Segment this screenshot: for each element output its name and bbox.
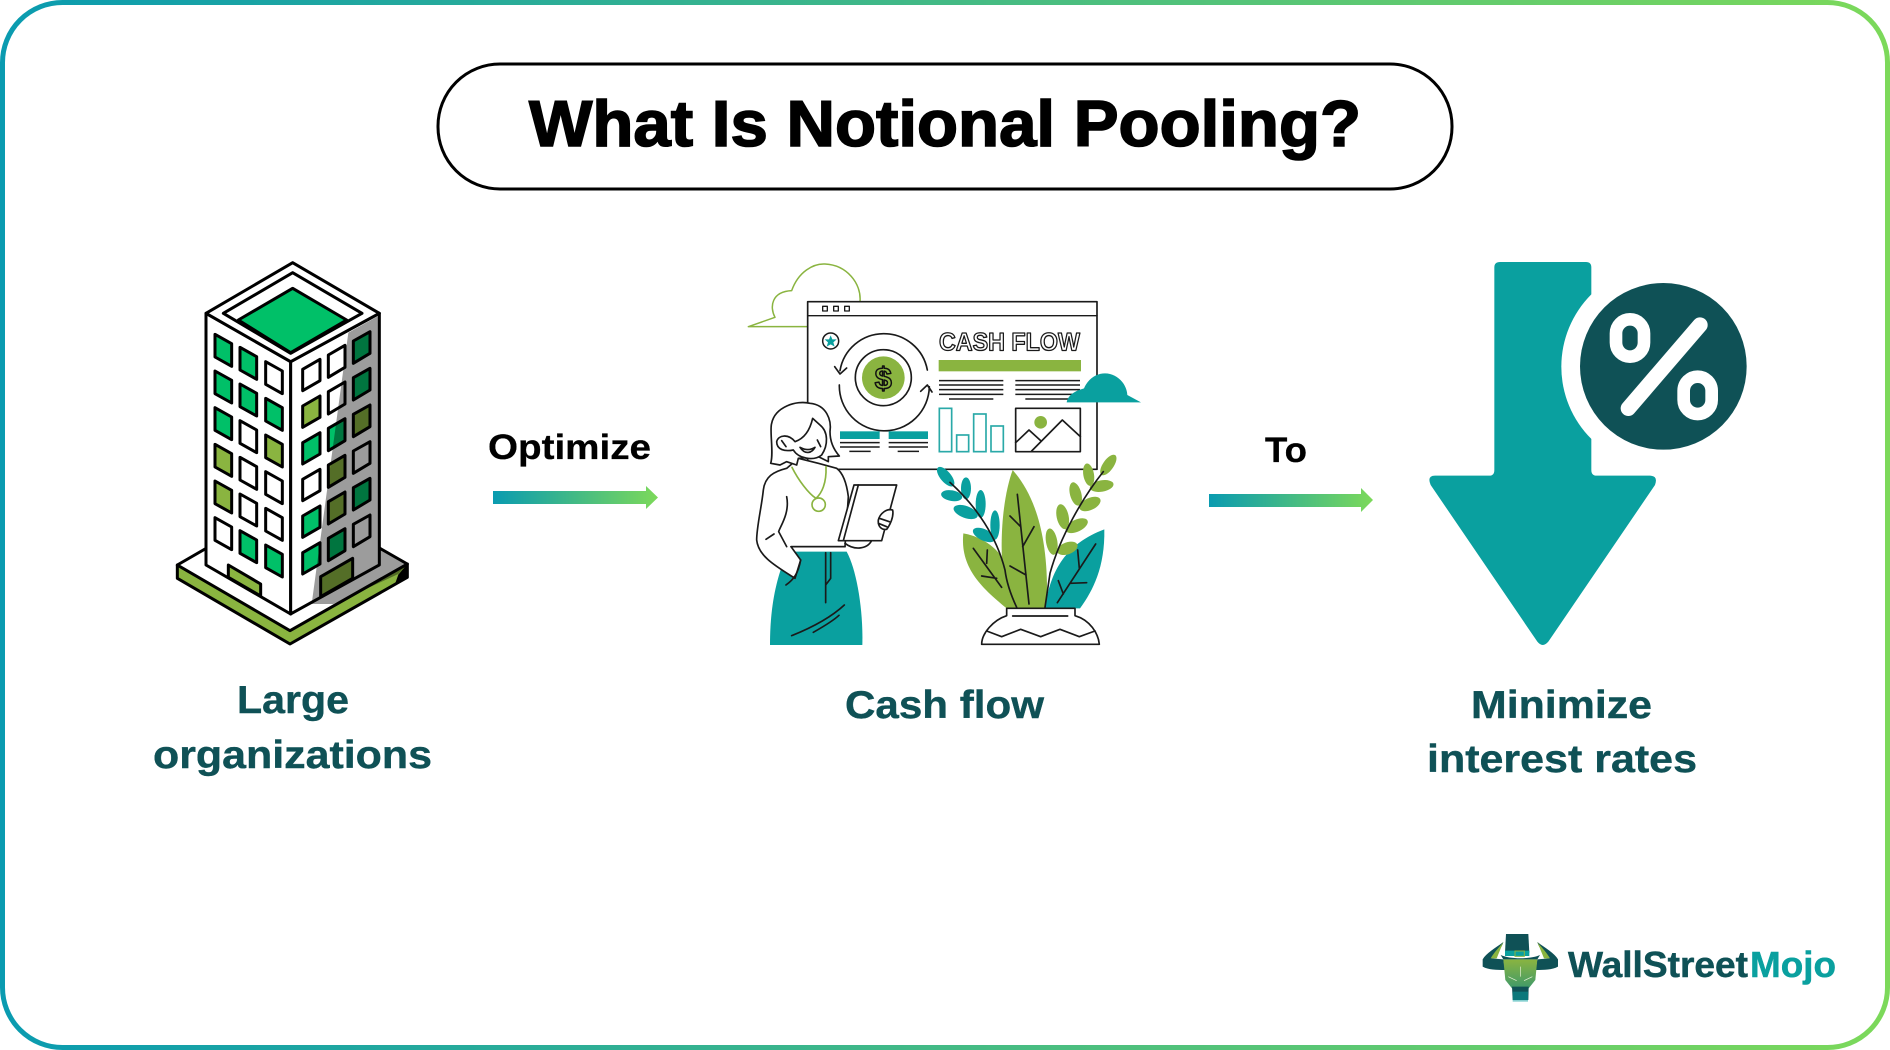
icon: dollar cycle [835,334,932,431]
tablet [838,485,897,541]
icon: bull with hat [1483,934,1558,1002]
label: minimize interest rates: interest rates [1427,738,1697,781]
label: large organizations: Large [237,679,349,722]
skirt [770,552,862,645]
title pill [438,64,1452,189]
teal cloud [1067,373,1141,402]
woman figure [757,402,897,645]
icon: dollar cycle: $ [875,362,892,396]
label: minimize interest rates: Minimize [1471,684,1652,727]
title text: What Is Notional Pooling? [529,87,1361,160]
plant [934,452,1120,644]
icon: office building [177,263,407,644]
torso and arm [757,458,848,578]
down arrow [1429,262,1656,645]
logo: wallstreetmojo [1483,934,1836,1002]
text lines [840,381,1080,451]
image placeholder [1016,408,1080,452]
label: minimize interest rates [1427,684,1697,781]
wordmark: Mojo [1750,944,1836,985]
illustration: cash flow [748,264,1141,645]
icon: star badge [823,333,839,349]
green bar [939,360,1081,371]
arrow: to [1209,488,1373,512]
hair and face [771,402,839,465]
wordmark: WallStreet [1568,944,1748,985]
label: large organizations [153,679,432,777]
teal bars [840,431,928,439]
bar chart [939,408,1003,452]
leaves [963,533,1017,608]
label: optimize: Optimize [488,428,651,467]
arrow: optimize [493,486,658,509]
browser window [808,302,1097,469]
wordmark [1568,944,1836,985]
label: large organizations: organizations [153,734,432,777]
label: cash flow: Cash flow [845,684,1045,727]
cloud outline [748,264,860,327]
necklace [792,467,826,498]
percent badge [1580,283,1747,450]
heading: cash flow: CASH FLOW [939,330,1081,357]
label: to: To [1265,431,1307,470]
pot [982,608,1099,644]
icon: down arrow with percent [1429,262,1765,645]
